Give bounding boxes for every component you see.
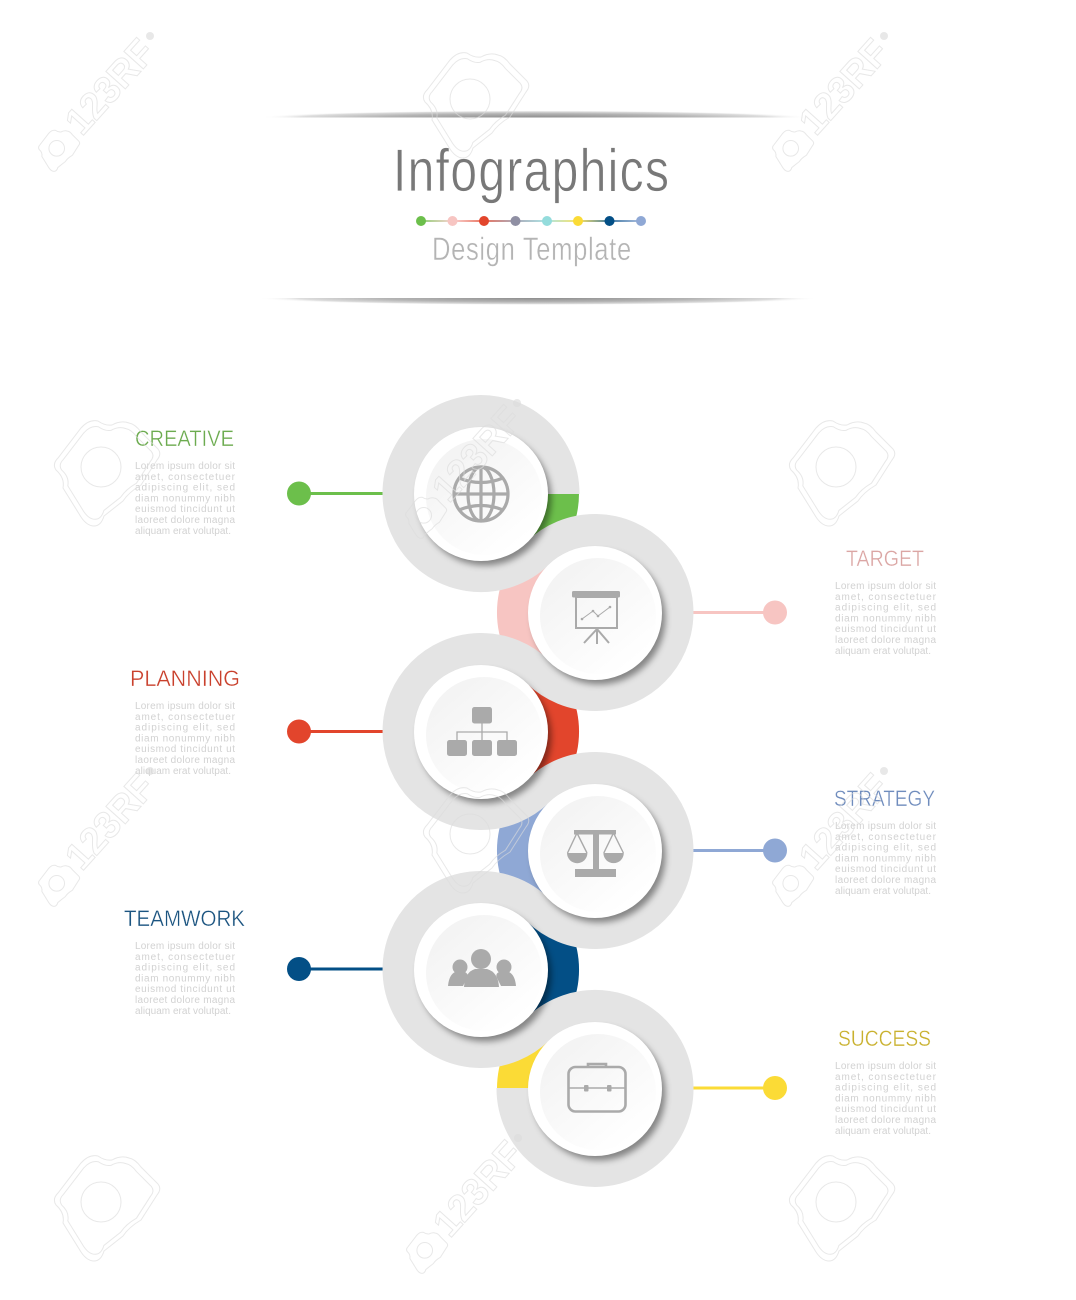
label block: strategy: euismod tincidunt ut	[835, 864, 936, 875]
label block: creative	[135, 426, 236, 537]
label block: creative: amet, consectetuer	[135, 472, 236, 483]
label block: planning: amet, consectetuer	[135, 712, 236, 723]
watermark: top left logotype: 123RF	[57, 32, 164, 143]
watermark: bottom centre logotype: 123RF	[425, 1134, 532, 1245]
node 2: presentation board	[528, 546, 666, 684]
watermark: lower right logotype: 123RF	[791, 767, 898, 878]
watermark: centre logotype: 123RF	[424, 399, 531, 510]
watermark: top centre camera mark	[423, 53, 529, 158]
label block: target: aliquam erat volutpat.	[835, 646, 931, 657]
label block: target	[835, 546, 937, 657]
label block: strategy: adipiscing elit, sed	[835, 842, 936, 854]
label block: success	[835, 1026, 937, 1137]
label block: creative: adipiscing elit, sed	[135, 482, 235, 494]
icon: balance scale	[567, 830, 624, 877]
icon: presentation board	[572, 591, 620, 644]
connector lines and end dots	[287, 482, 787, 1100]
label block: strategy	[834, 786, 937, 897]
label block: teamwork: aliquam erat volutpat.	[135, 1006, 231, 1017]
label block: strategy: Lorem ipsum dolor sit	[835, 821, 936, 832]
label block: success: laoreet dolore magna	[835, 1115, 936, 1126]
watermark: bottom left camera mark	[54, 1156, 160, 1261]
label block: teamwork: laoreet dolore magna	[135, 995, 235, 1006]
node 3: org chart	[414, 665, 552, 804]
label block: target: laoreet dolore magna	[835, 635, 936, 646]
watermark: left camera mark	[54, 421, 160, 526]
label block: target: diam nonummy nibh	[835, 614, 936, 624]
watermark: bottom centre logotype	[407, 1134, 532, 1273]
label block: strategy: diam nonummy nibh	[835, 854, 936, 864]
node 6: briefcase	[528, 1022, 666, 1160]
watermark: lower right logotype	[773, 767, 898, 906]
watermark: centre camera mark	[423, 788, 529, 893]
node 5: team	[414, 903, 552, 1042]
label block: teamwork: adipiscing elit, sed	[135, 962, 235, 974]
coloured dot rule	[416, 216, 646, 226]
label block: planning: euismod tincidunt ut	[135, 744, 235, 755]
label block: planning: adipiscing elit, sed	[135, 722, 235, 734]
label block: success: Lorem ipsum dolor sit	[835, 1061, 936, 1072]
icon: org chart	[447, 707, 517, 756]
watermark: lower left logotype: 123RF	[57, 767, 164, 878]
label block: creative: CREATIVE	[135, 426, 234, 451]
watermark: top left logotype	[39, 32, 164, 171]
header: title block	[257, 110, 819, 305]
label block: strategy: laoreet dolore magna	[835, 875, 936, 886]
label block: success: aliquam erat volutpat.	[835, 1126, 931, 1137]
label block: success: euismod tincidunt ut	[835, 1104, 936, 1115]
label block: success: adipiscing elit, sed	[835, 1082, 936, 1094]
icon: team of people	[448, 949, 516, 987]
label block: creative: Lorem ipsum dolor sit	[135, 461, 235, 472]
icon: briefcase	[568, 1064, 626, 1112]
label block: creative: euismod tincidunt ut	[135, 504, 235, 515]
label block: teamwork: amet, consectetuer	[135, 952, 236, 963]
label block: creative: diam nonummy nibh	[135, 494, 235, 504]
subtitle: Design Template	[432, 232, 631, 268]
label block: success: diam nonummy nibh	[835, 1094, 936, 1104]
bottom shadow rule	[278, 298, 798, 304]
watermark: lower left logotype	[39, 767, 164, 906]
watermark: centre logotype	[406, 399, 531, 538]
label block: target: TARGET	[846, 546, 924, 571]
label block: target: adipiscing elit, sed	[835, 602, 936, 614]
label block: strategy: aliquam erat volutpat.	[835, 886, 931, 897]
label block: planning: diam nonummy nibh	[135, 734, 235, 744]
title: Infographics	[393, 137, 669, 204]
label block: planning: aliquam erat volutpat.	[135, 766, 231, 777]
label block: target: amet, consectetuer	[835, 592, 937, 603]
node 1: globe	[414, 427, 552, 566]
icon: globe	[454, 467, 508, 521]
label block: success: amet, consectetuer	[835, 1072, 937, 1083]
node 4: balance scale	[528, 784, 666, 922]
label block: creative: laoreet dolore magna	[135, 515, 235, 526]
coloured ring segments	[481, 494, 595, 1088]
label block: planning: Lorem ipsum dolor sit	[135, 701, 235, 712]
watermark: right camera mark	[789, 421, 895, 526]
watermark: top right logotype	[773, 32, 898, 171]
label block: target: euismod tincidunt ut	[835, 624, 936, 635]
label block: teamwork: diam nonummy nibh	[135, 974, 235, 984]
grey ribbon rings	[383, 396, 693, 1186]
watermarks	[39, 32, 898, 1273]
label block: teamwork: Lorem ipsum dolor sit	[135, 941, 235, 952]
label block: creative: aliquam erat volutpat.	[135, 526, 231, 537]
top shadow rule	[280, 111, 790, 118]
label block: planning: laoreet dolore magna	[135, 755, 235, 766]
label block: planning: PLANNING	[130, 666, 240, 691]
label block: teamwork: euismod tincidunt ut	[135, 984, 235, 995]
label block: target: Lorem ipsum dolor sit	[835, 581, 936, 592]
label block: strategy: STRATEGY	[834, 786, 935, 811]
label block: strategy: amet, consectetuer	[835, 832, 937, 843]
label block: teamwork	[124, 906, 245, 1017]
watermark: bottom right camera mark	[789, 1156, 895, 1261]
label block: success: SUCCESS	[838, 1026, 931, 1051]
label block: planning	[130, 666, 240, 777]
watermark: top right logotype: 123RF	[791, 32, 898, 143]
label block: teamwork: TEAMWORK	[124, 906, 245, 931]
